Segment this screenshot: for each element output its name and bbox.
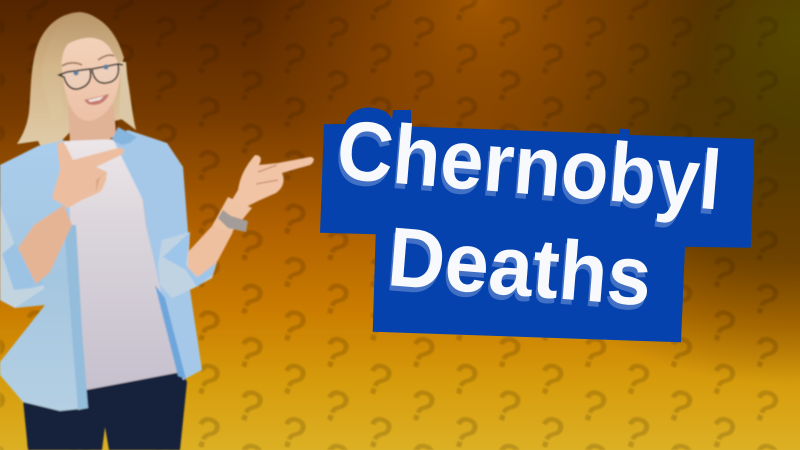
mouth bbox=[84, 94, 109, 105]
t-shirt bbox=[62, 139, 181, 390]
left sleeve bbox=[0, 205, 45, 308]
right sleeve bbox=[158, 232, 217, 298]
title text bbox=[334, 102, 725, 324]
jeans bbox=[23, 372, 187, 450]
title text shadow bbox=[332, 107, 723, 329]
title text: Chernobyl bbox=[334, 102, 725, 227]
hair back bbox=[17, 12, 136, 157]
pointing hand right bbox=[232, 155, 314, 208]
glasses bbox=[59, 64, 123, 89]
left sleeve cuff bbox=[2, 243, 50, 290]
eyebrows bbox=[62, 55, 114, 66]
shirt left panel bbox=[0, 140, 88, 411]
right forearm bbox=[188, 225, 233, 277]
right sleeve cuff bbox=[163, 232, 216, 287]
hair right strand bbox=[119, 62, 136, 130]
shirt right panel bbox=[112, 130, 202, 380]
title text shadow: Chernobyl bbox=[332, 107, 723, 232]
shirt button placket bbox=[64, 225, 88, 410]
watch bbox=[218, 210, 248, 232]
title banner bbox=[320, 102, 754, 342]
collar bbox=[112, 127, 137, 145]
left forearm bbox=[18, 205, 72, 284]
eyes bbox=[74, 70, 78, 76]
neck bbox=[68, 105, 116, 145]
hair fringe bbox=[42, 13, 124, 120]
title text shadow: Deaths bbox=[383, 214, 653, 329]
face bbox=[61, 33, 120, 121]
title text: Deaths bbox=[385, 209, 655, 324]
banner shape bbox=[320, 108, 754, 342]
pointing hand left bbox=[52, 142, 124, 208]
shirt dark fold bbox=[155, 285, 186, 379]
person pointing at the title bbox=[0, 12, 314, 450]
